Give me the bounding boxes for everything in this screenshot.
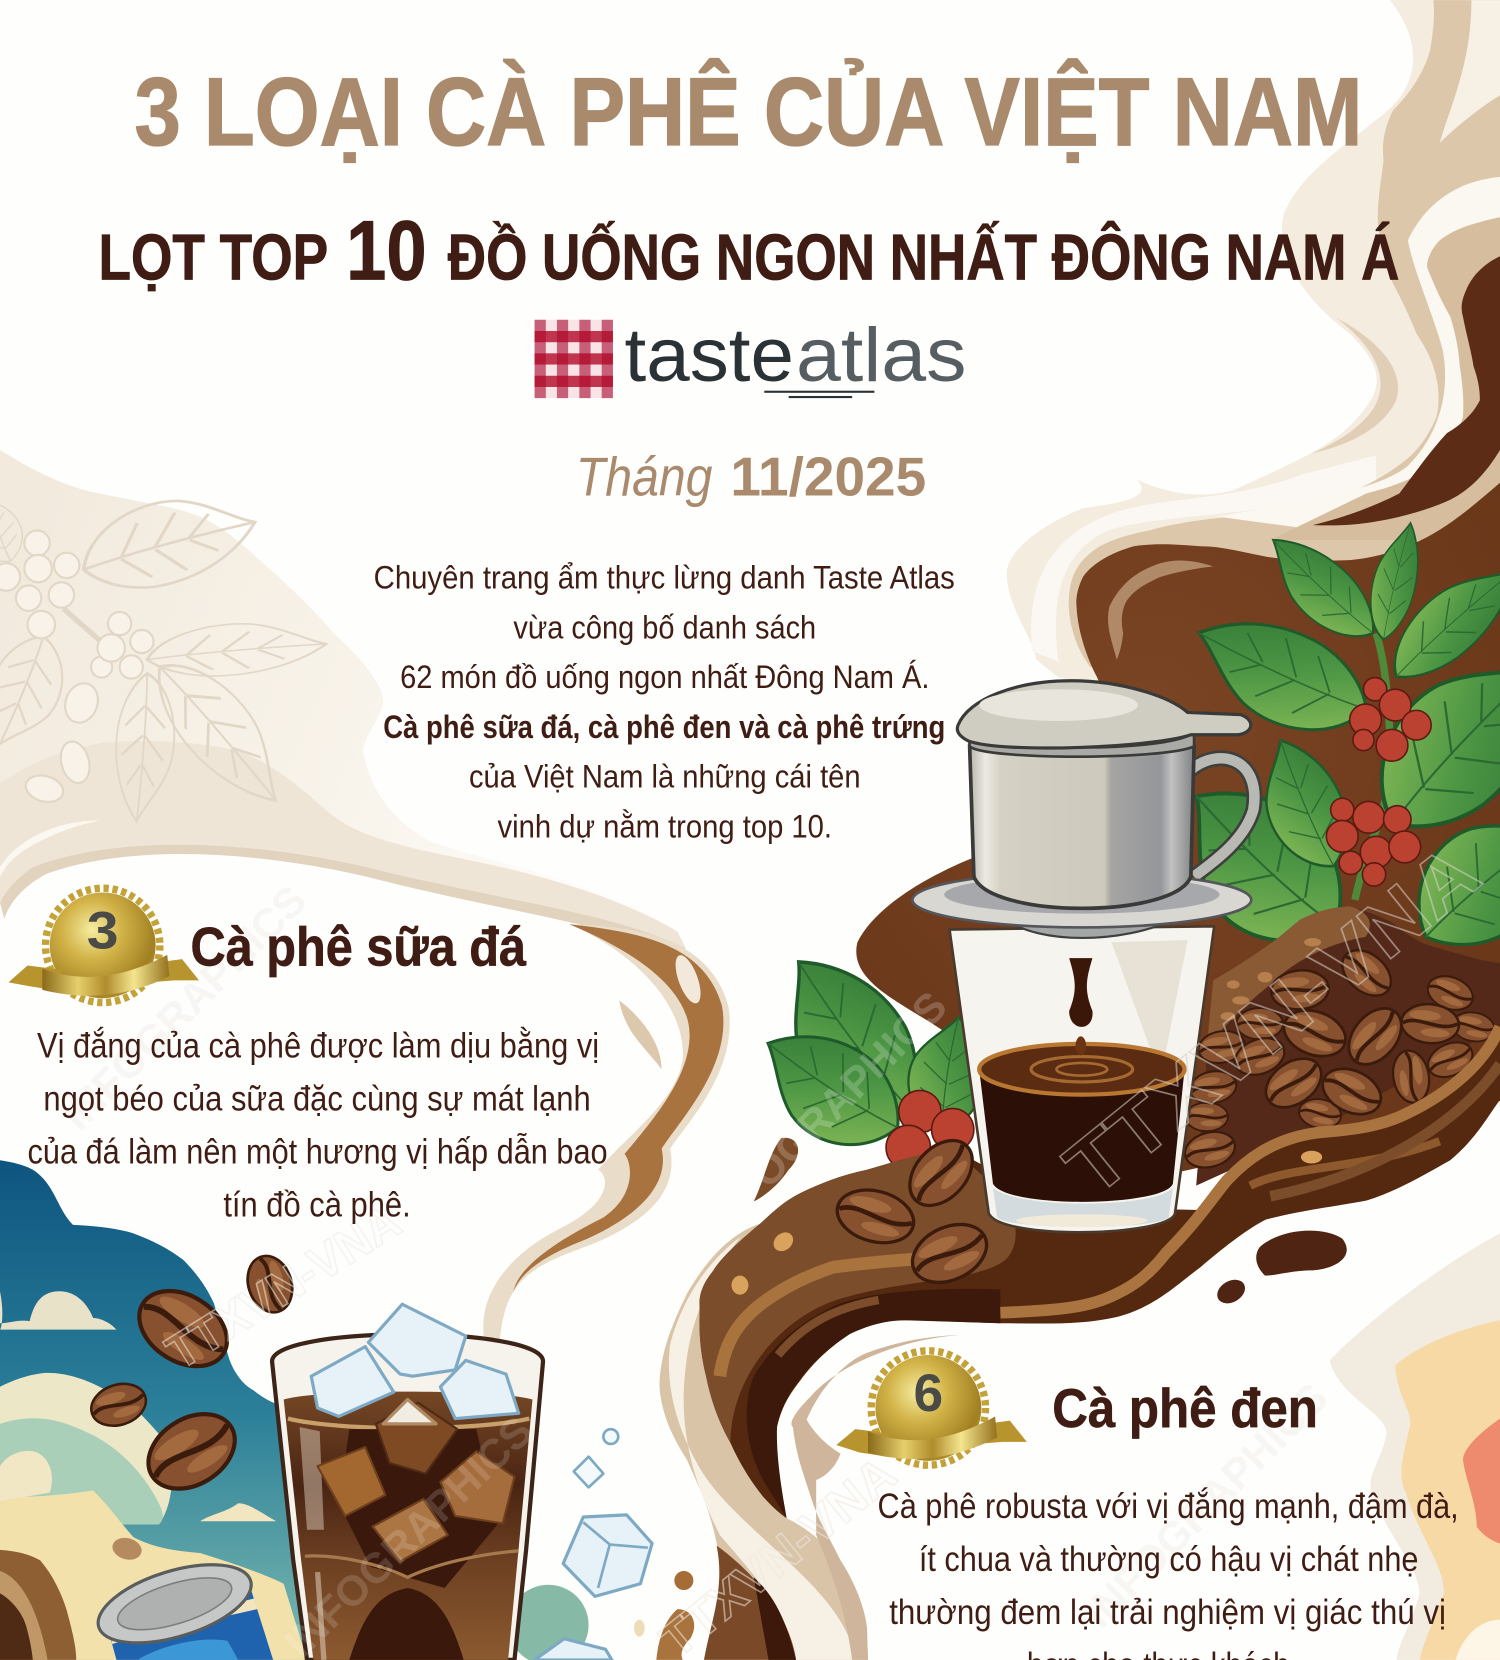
background: left cream swirl with coffee branch line art bbox=[0, 450, 686, 953]
logo: Taste Atlas bbox=[535, 313, 966, 398]
watermarks: INFOGRAPHICS bbox=[53, 876, 315, 1139]
body text: Cà phê sữa đá: của đá làm nên một hương vị hấp dẫn bao bbox=[28, 1132, 608, 1171]
badge: rank 3 gold seal bbox=[8, 888, 199, 1003]
watermarks: TTXVN-VNA bbox=[1048, 826, 1496, 1213]
date bbox=[576, 445, 926, 507]
brown wave carrying the glass and beans bbox=[699, 1022, 1500, 1518]
body text: Cà phê đen bbox=[878, 1487, 1459, 1660]
logo: Taste Atlas: taste bbox=[625, 313, 794, 398]
front coffee beans on the wave bbox=[831, 1128, 996, 1294]
intro text: vừa công bố danh sách bbox=[513, 608, 816, 645]
ice cubes in and around the glass bbox=[311, 1304, 652, 1660]
body text: Cà phê sữa đá: Vị đắng của cà phê được làm dịu bằng vị bbox=[37, 1027, 599, 1066]
caramel milk-coffee swirl rising from the glass bbox=[483, 924, 730, 1366]
badge number 6: 6 bbox=[914, 1364, 943, 1423]
date: 11/2025 bbox=[730, 445, 926, 507]
body text: Cà phê sữa đá: ngọt béo của sữa đặc cùng sự mát lạnh bbox=[43, 1080, 591, 1119]
badge: rank 6 gold seal bbox=[836, 1351, 1027, 1465]
intro text bbox=[374, 559, 955, 844]
coffee leaves and branches bbox=[740, 518, 1500, 1171]
coffee grounds and bean pile bbox=[1181, 906, 1500, 1186]
intro text: 62 món đồ uống ngon nhất Đông Nam Á. bbox=[400, 658, 929, 695]
heading: Cà phê đen: Cà phê đen bbox=[1052, 1377, 1318, 1439]
condensed milk can bbox=[89, 1549, 273, 1660]
badge number 3: 3 bbox=[87, 902, 119, 961]
watermarks bbox=[53, 826, 1496, 1660]
body text: Cà phê sữa đá bbox=[28, 1027, 608, 1224]
iced milk coffee glass bbox=[272, 1334, 543, 1660]
intro text: của Việt Nam là những cái tên bbox=[469, 758, 861, 795]
glass of dripping black coffee bbox=[950, 926, 1214, 1232]
subtitle bbox=[98, 203, 1399, 298]
body text: Cà phê đen: ít chua và thường có hậu vị chát nhẹ bbox=[919, 1540, 1418, 1579]
coffee berries bbox=[886, 678, 1431, 1170]
intro text: vinh dự nằm trong top 10. bbox=[498, 807, 832, 844]
heading: Cà phê sữa đá: Cà phê sữa đá bbox=[191, 915, 526, 977]
intro text: Chuyên trang ẩm thực lừng danh Taste Atlas bbox=[374, 559, 955, 596]
watermarks: INFOGRAPHICS bbox=[693, 982, 956, 1245]
watermarks: INFOGRAPHICS bbox=[275, 1407, 541, 1660]
coastal landscape at bottom left bbox=[0, 1160, 589, 1660]
body text: Cà phê đen: thường đem lại trải nghiệm vị giác thú vị bbox=[889, 1593, 1446, 1632]
logo: Taste Atlas: atlas bbox=[796, 313, 966, 398]
background: bottom right peach and coral steam bbox=[1330, 1233, 1500, 1660]
watermarks: TTXVN-VNA bbox=[157, 1194, 410, 1380]
date: Tháng bbox=[576, 445, 713, 507]
Vietnamese phin filter bbox=[912, 681, 1254, 938]
background: top right cream and brown waves bbox=[1007, 0, 1500, 741]
watermarks: INFOGRAPHICS bbox=[1074, 1374, 1337, 1637]
subtitle: LỌT TOP bbox=[98, 222, 328, 294]
body text: Cà phê sữa đá: tín đồ cà phê. bbox=[223, 1185, 411, 1224]
background: large brown coffee blob behind the phin bbox=[856, 483, 1500, 1196]
intro text: Cà phê sữa đá, cà phê đen và cà phê trứng bbox=[383, 708, 945, 745]
subtitle: 10 bbox=[346, 203, 427, 298]
background: milk swirl along the brown wave bbox=[634, 1224, 960, 1660]
